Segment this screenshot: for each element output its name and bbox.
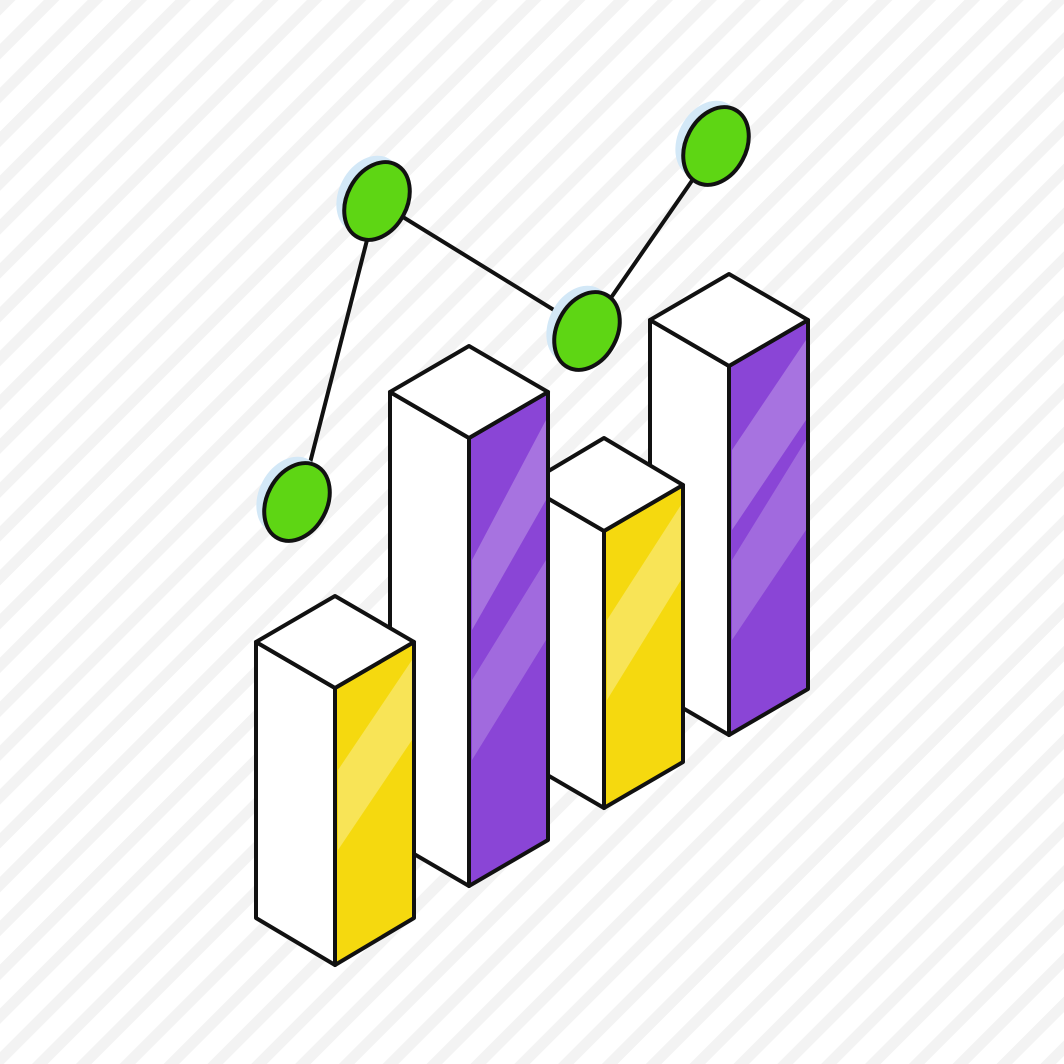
bar 3 yellow bbox=[525, 438, 683, 808]
line chart bbox=[242, 89, 763, 552]
bar 4 purple bbox=[650, 274, 808, 735]
node 3 bbox=[532, 274, 634, 381]
bar 1 yellow bbox=[256, 596, 414, 965]
node 2 bbox=[322, 144, 424, 251]
node 1 bbox=[242, 445, 344, 552]
bar 2 purple bbox=[390, 346, 548, 886]
node 4 bbox=[661, 89, 763, 196]
